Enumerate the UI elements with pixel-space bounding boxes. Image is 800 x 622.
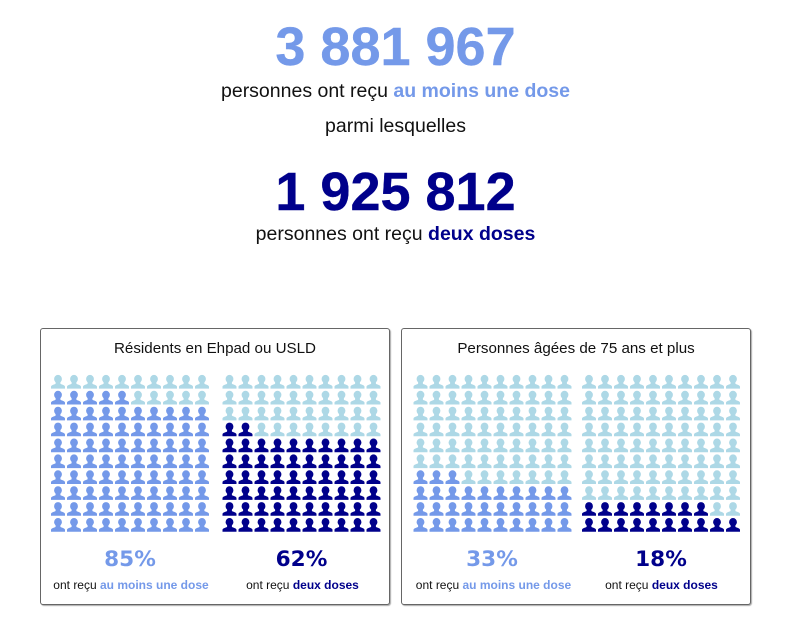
text: parmi lesquelles: parmi lesquelles (325, 115, 466, 137)
percentage: 62%: 62% (276, 547, 327, 572)
caption: au moins une dose: ont reçu au moins une dose (416, 578, 571, 592)
panel title: Résidents en Ehpad ou USLD (114, 340, 316, 357)
text: two doses: personnes ont reçu deux doses (256, 223, 535, 245)
text: at least one dose: personnes ont reçu au moins une dose (221, 80, 570, 102)
panel: Résidents en Ehpad ou USLD (40, 328, 390, 605)
caption: au moins une dose: ont reçu au moins une dose (53, 578, 209, 592)
icon grid: 18% two doses (582, 375, 740, 532)
percentage: 18%: 18% (635, 547, 687, 572)
panel: Personnes âgées de 75 ans et plus (401, 328, 751, 605)
icon grid: 62% two doses (222, 375, 380, 532)
headline number: two doses: 1 925 812 (275, 162, 516, 222)
caption: deux doses: ont reçu deux doses (246, 578, 359, 592)
percentage: 33%: 33% (466, 547, 518, 572)
icon grid: 33% at least one dose (414, 375, 572, 532)
percentage: 85%: 85% (104, 547, 156, 572)
caption: deux doses: ont reçu deux doses (605, 578, 718, 592)
icon grid: 85% at least one dose (51, 375, 209, 532)
headline number: at least one dose: 3 881 967 (275, 17, 516, 77)
panel title: Personnes âgées de 75 ans et plus (457, 340, 695, 357)
